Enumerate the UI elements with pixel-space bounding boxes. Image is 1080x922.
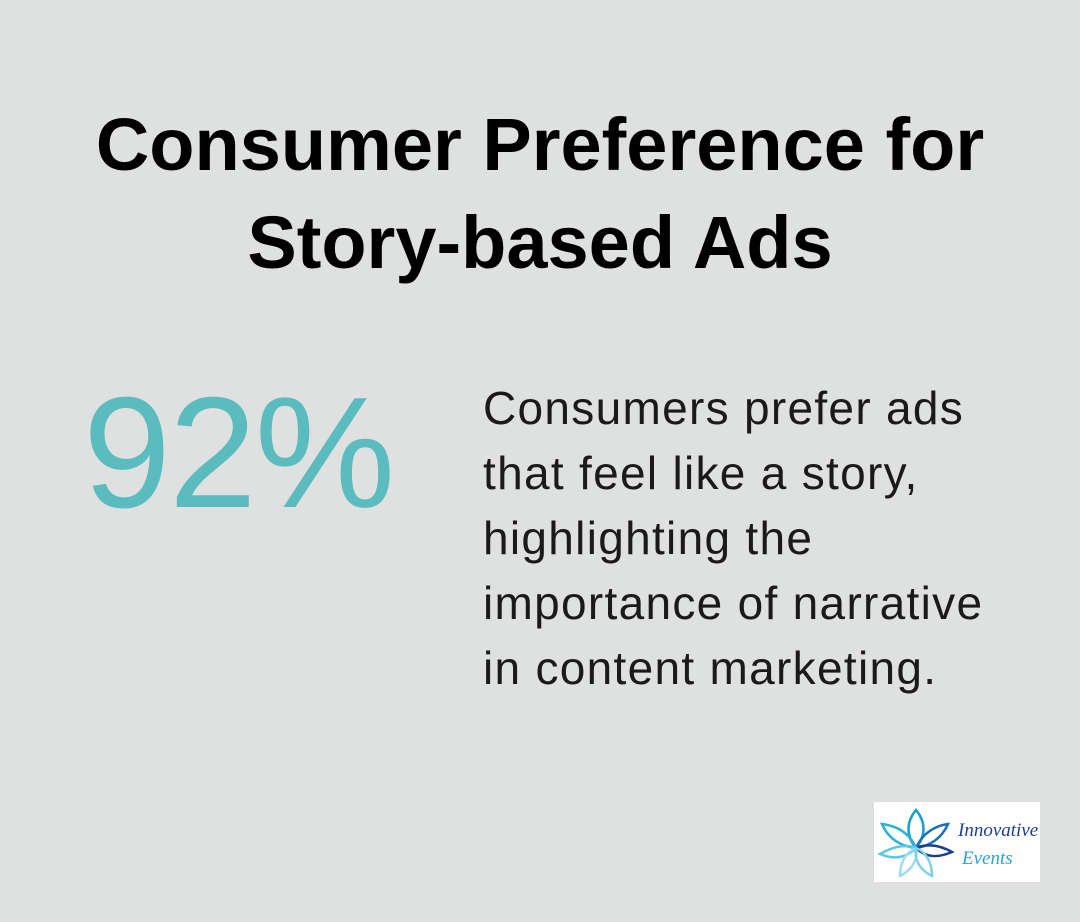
- description text: [483, 382, 983, 694]
- description text: in content marketing.: [483, 642, 937, 694]
- description text: Consumers prefer ads: [483, 382, 964, 434]
- icon: lotus: [880, 810, 952, 876]
- description text: highlighting the: [483, 512, 813, 564]
- title: [96, 103, 984, 284]
- description text: importance of narrative: [483, 577, 983, 629]
- title: Consumer Preference for: [96, 103, 984, 186]
- logo text: Innovative: [957, 820, 1038, 841]
- logo: Events: [961, 848, 1013, 869]
- logo: [874, 802, 1040, 882]
- description text: that feel like a story,: [483, 447, 919, 499]
- title: Story-based Ads: [247, 201, 833, 284]
- stat number: 92%: [83, 365, 393, 541]
